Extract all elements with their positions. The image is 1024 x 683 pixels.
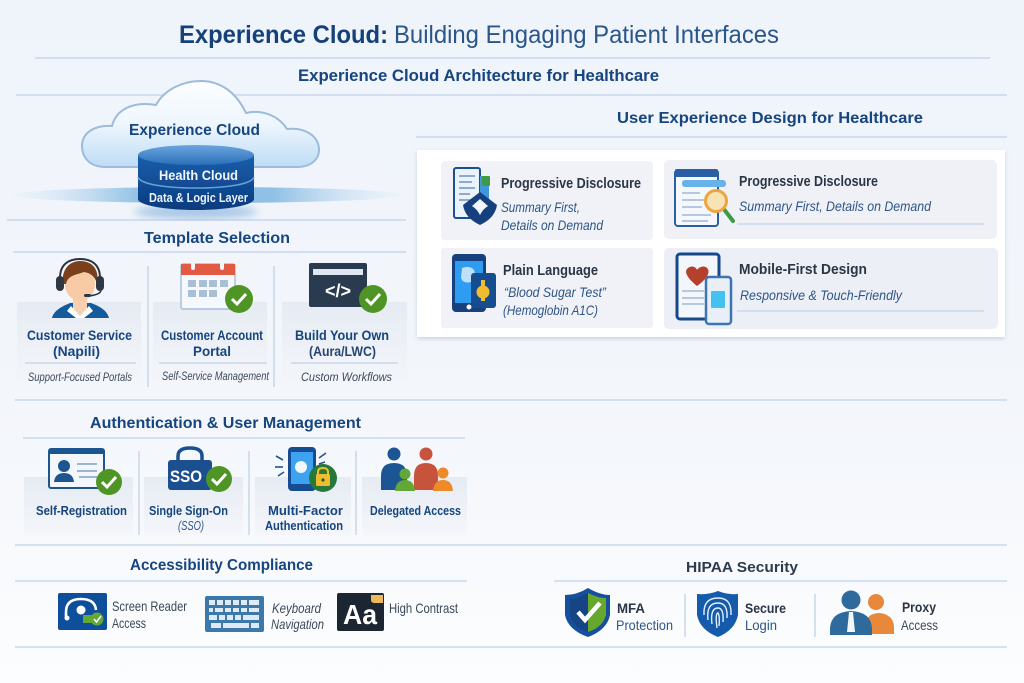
card: build your own (282, 263, 407, 387)
icon: support agent (52, 259, 109, 318)
icon: screen reader (58, 593, 107, 630)
panel: accessibility compliance (58, 593, 458, 632)
icon: fingerprint shield (697, 591, 738, 637)
item: keyboard navigation (205, 596, 324, 632)
panel: HIPAA security (565, 588, 938, 637)
item: delegated access: Delegated Access (370, 503, 461, 518)
card: mobile-first design (664, 248, 998, 329)
heading: accessibility compliance: Accessibility Compliance (130, 557, 313, 574)
item: single sign-on: (SSO) (178, 518, 204, 533)
panel: authentication and user management (24, 447, 467, 535)
card: progressive disclosure 2: Summary First, Details on Demand (739, 198, 932, 214)
panel: user experience design (417, 150, 1005, 337)
label: Customer Service (27, 327, 132, 343)
label: Progressive Disclosure (501, 175, 641, 192)
icon: phone with bulb (452, 254, 496, 312)
label: Experience Cloud: Experience Cloud (129, 122, 260, 139)
item: MFA protection: Protection (616, 617, 673, 633)
item: self-registration: Self-Registration (36, 503, 127, 518)
label: Health Cloud: Health Cloud (159, 167, 238, 183)
card: mobile-first design: Responsive & Touch-Friendly (740, 287, 903, 303)
card: customer account portal: Portal (193, 343, 231, 359)
card: customer service (17, 259, 141, 387)
icon: phone with lock (275, 447, 337, 492)
item: MFA protection (565, 588, 673, 637)
heading: HIPAA security: HIPAA Security (686, 559, 799, 576)
label: Progressive Disclosure (739, 173, 878, 190)
label: Customer Account (161, 327, 263, 343)
icon: group of people (381, 448, 453, 491)
label: Mobile-First Design (739, 261, 867, 278)
item: multi-factor authentication: Authentication (265, 518, 343, 533)
card: customer account portal: Self-Service Management (162, 369, 270, 383)
card: progressive disclosure 1 (441, 161, 653, 240)
diagram: architecture cloud and data layer (12, 81, 402, 219)
platform glow (12, 187, 402, 203)
title (179, 21, 779, 49)
panel: template selection (17, 259, 407, 387)
item: single sign-on: Single Sign-On (149, 503, 228, 518)
item: multi-factor authentication: Multi-Factor (268, 503, 343, 518)
label: data and logic layer: Data & Logic Layer (149, 190, 248, 205)
item: screen reader access: Screen Reader (112, 598, 187, 614)
heading: authentication: Authentication & User Management (90, 415, 361, 432)
item: MFA protection: MFA (617, 600, 645, 616)
item: secure login: Secure (745, 600, 786, 616)
item: self-registration (36, 449, 127, 518)
item: proxy access: Access (901, 617, 938, 633)
item: delegated access (370, 448, 461, 518)
card: progressive disclosure 1: Summary First, (501, 199, 580, 215)
title: Building Engaging Patient Interfaces (394, 21, 779, 49)
card: customer service: (Napili) (53, 343, 100, 359)
icon: code window with check: </> (325, 281, 351, 301)
icon: shield with check (565, 588, 610, 637)
icon: tablet and phone with heart (677, 254, 731, 324)
item: secure login: Login (745, 617, 777, 633)
icon: cloud (82, 81, 319, 167)
item: high contrast: High Contrast (389, 600, 458, 616)
card: plain language (441, 248, 653, 328)
card: plain language: “Blood Sugar Test” (504, 284, 607, 300)
title: Experience Cloud: (179, 21, 388, 49)
card: build your own: Custom Workflows (301, 370, 392, 384)
item: screen reader access: Access (112, 615, 146, 631)
heading: template selection: Template Selection (144, 230, 290, 247)
card: progressive disclosure 1: Details on Demand (501, 217, 604, 233)
item: single sign-on (149, 448, 232, 533)
card: customer service: Support-Focused Portals (28, 370, 132, 384)
label: Build Your Own (295, 327, 389, 343)
card: build your own: (Aura/LWC) (309, 343, 376, 359)
item: multi-factor authentication (265, 447, 343, 533)
item: screen reader access (58, 593, 187, 631)
icon: keyboard (205, 596, 264, 632)
icon: document and shield (454, 168, 497, 225)
item: secure login (697, 591, 786, 637)
card: progressive disclosure 2 (664, 160, 997, 239)
label: Plain Language (503, 262, 598, 279)
card: plain language: (Hemoglobin A1C) (503, 302, 598, 318)
item: keyboard navigation: Navigation (271, 616, 324, 632)
icon: high contrast Aa: Aa (343, 599, 377, 630)
icon: two people with tie (830, 590, 894, 635)
card: customer account portal (153, 262, 270, 387)
item: keyboard navigation: Keyboard (272, 600, 322, 616)
heading: user experience design: User Experience Design for Healthcare (617, 110, 923, 127)
icon: SSO padlock with check: SSO (170, 467, 202, 486)
item: proxy access: Proxy (902, 599, 936, 615)
item: high contrast (337, 593, 458, 631)
icon: document with magnifier (675, 169, 733, 226)
icon: database cylinder (138, 145, 254, 210)
heading: architecture: Experience Cloud Architecture for Healthcare (298, 66, 659, 85)
icon: calendar with check (181, 262, 253, 313)
item: proxy access (830, 590, 938, 635)
icon: ID card with check (49, 449, 122, 495)
